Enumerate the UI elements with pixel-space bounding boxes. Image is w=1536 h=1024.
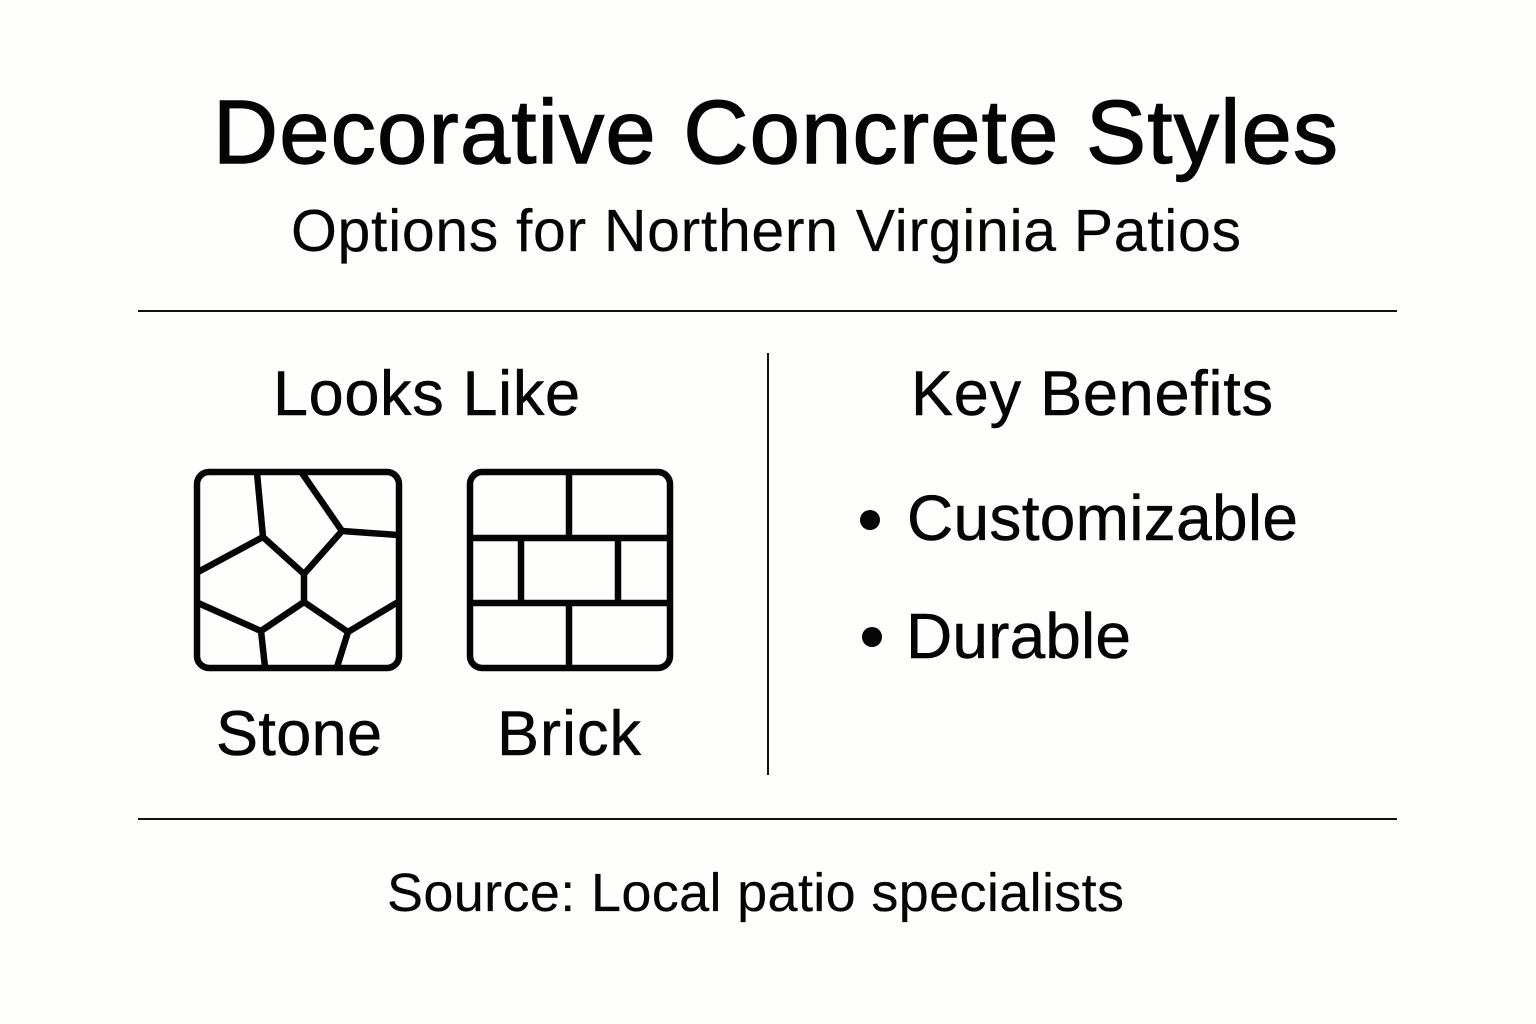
icon: brick pattern (470, 472, 670, 668)
panel: looks like (197, 359, 670, 769)
icon: stone pattern (197, 472, 399, 668)
heading: looks like: Looks Like (273, 359, 580, 429)
label: stone: Stone (216, 699, 382, 769)
subtitle: Options for Northern Virginia Patios (291, 198, 1241, 264)
panel: key benefits (860, 359, 1298, 672)
bullet: durable: Durable (906, 600, 1131, 672)
label: brick: Brick (497, 699, 642, 769)
heading: key benefits: Key Benefits (911, 359, 1273, 429)
title: Decorative Concrete Styles (213, 83, 1338, 183)
source note: Source: Local patio specialists (387, 863, 1124, 923)
bullet: customizable: Customizable (907, 482, 1298, 554)
